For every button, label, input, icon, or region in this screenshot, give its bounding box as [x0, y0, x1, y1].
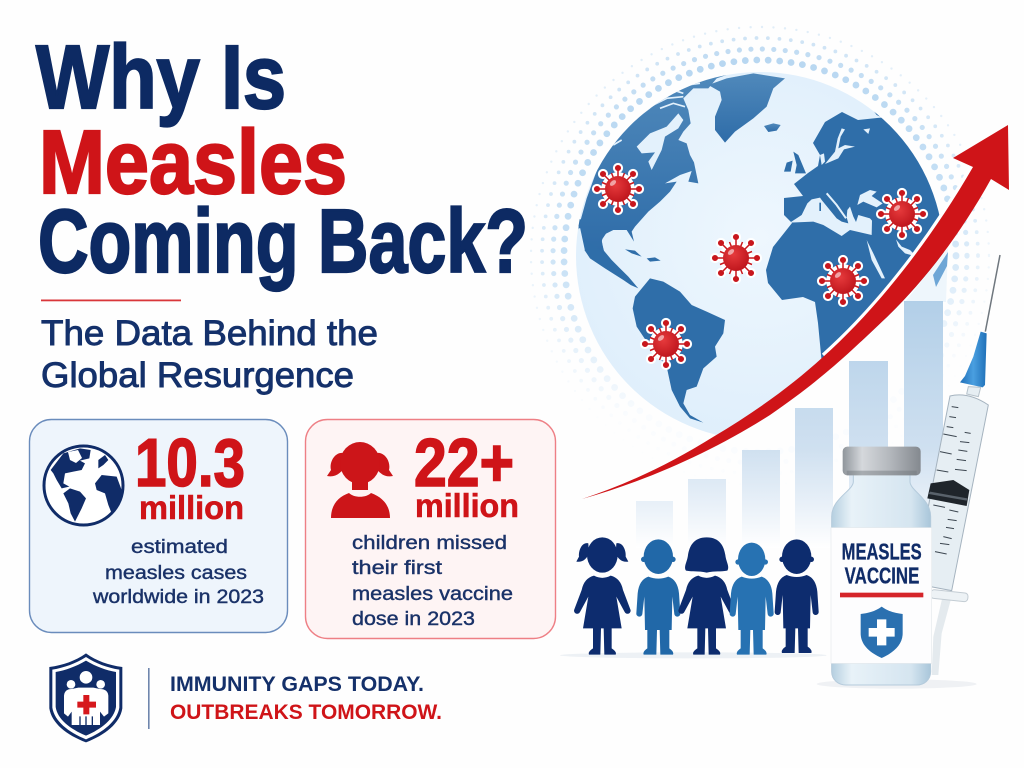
icon: girl — [327, 442, 393, 518]
icon: shield logo — [49, 653, 122, 742]
virus markers — [594, 165, 926, 368]
child: girl with pigtails — [574, 537, 631, 655]
panel: 22+ million children: million — [415, 487, 519, 524]
arrow — [582, 125, 1009, 499]
icon: shield with cross — [861, 607, 903, 658]
title — [36, 28, 528, 292]
panel: 22+ million children — [306, 420, 556, 638]
panel: 22+ million children: measles vaccine — [352, 584, 513, 605]
title: Why Is — [36, 28, 286, 128]
panel: 10.3 million cases: worldwide in 2023 — [92, 587, 264, 608]
vaccine vial: VACCINE — [845, 562, 919, 588]
panel: 10.3 million cases: 10.3 — [135, 425, 245, 501]
tagline: OUTBREAKS TOMORROW. — [170, 701, 442, 724]
subtitle: Global Resurgence — [41, 356, 354, 395]
child: girl with long hair — [678, 537, 735, 655]
syringe — [913, 255, 1000, 675]
bar chart — [636, 301, 943, 548]
panel: 10.3 million cases — [30, 420, 288, 632]
icon: globe — [44, 446, 123, 525]
vaccine vial: MEASLES — [842, 538, 922, 564]
panel: 22+ million children: children missed — [352, 533, 507, 554]
tagline — [170, 673, 442, 724]
panel: 10.3 million cases: estimated — [131, 537, 228, 558]
children silhouettes — [560, 537, 827, 658]
child: boy navy — [775, 539, 819, 653]
child: small boy — [730, 543, 774, 655]
title: Measles — [39, 113, 347, 213]
subtitle: The Data Behind the — [41, 314, 378, 353]
vaccine vial — [817, 447, 977, 689]
panel: 22+ million children: their first — [352, 558, 443, 579]
globe — [575, 72, 960, 440]
title: Coming Back? — [38, 192, 528, 292]
panel: 22+ million children: dose in 2023 — [352, 609, 475, 630]
tagline: IMMUNITY GAPS TODAY. — [170, 673, 424, 696]
child: boy — [636, 539, 680, 655]
panel: 10.3 million cases: million — [139, 489, 244, 526]
halo of dots — [531, 27, 989, 485]
panel: 22+ million children: 22+ — [414, 425, 514, 501]
subtitle — [41, 314, 378, 395]
area below arrow — [582, 179, 1024, 502]
panel: 10.3 million cases: measles cases — [105, 563, 247, 584]
